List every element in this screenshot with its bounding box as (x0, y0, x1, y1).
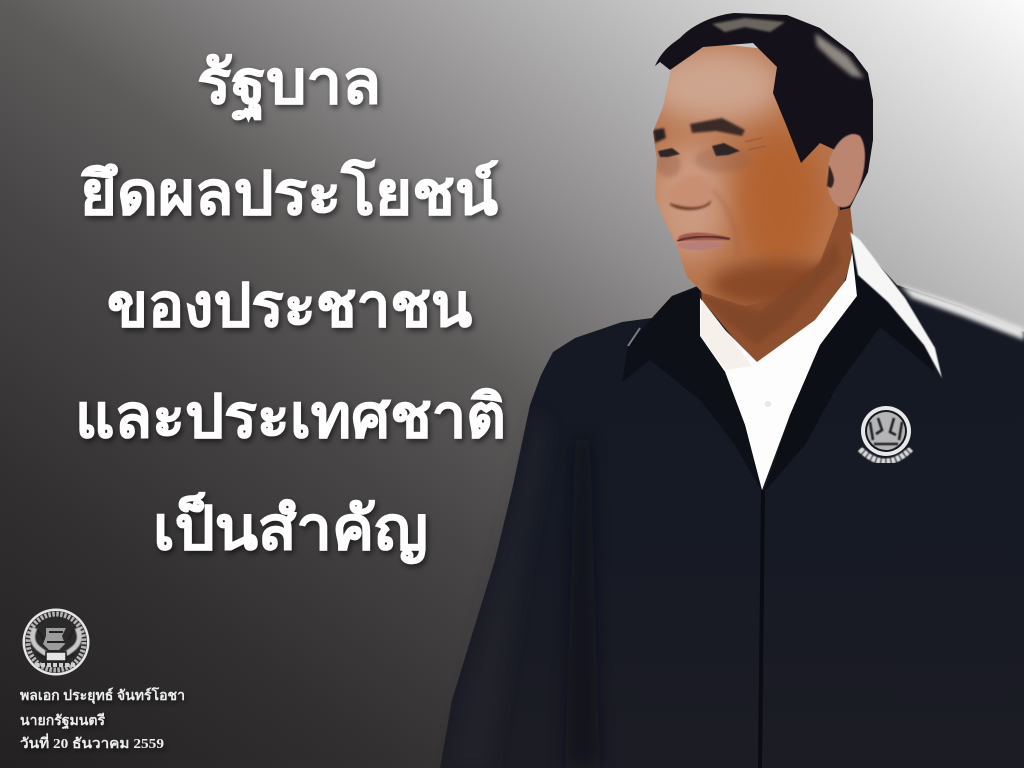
title line 4: และประเทศชาติ (75, 384, 506, 450)
cheek crease (712, 190, 730, 217)
ear (827, 134, 865, 207)
title line 1: รัฐบาล (197, 50, 381, 121)
title line 2: ยึดผลประโยชน์ (80, 158, 499, 227)
jacket zipper (760, 490, 763, 768)
portrait: man in dark jacket (440, 13, 1024, 768)
date: วันที่ 20 ธันวาคม 2559 (20, 733, 164, 752)
signature text block (20, 686, 185, 752)
arm lighter edge (448, 410, 550, 768)
position: นายกรัฐมนตรี (20, 713, 105, 730)
name: พลเอก ประยุทธ์ จันทร์โอชา (20, 686, 185, 704)
jacket (440, 232, 1024, 768)
neck (700, 200, 855, 363)
title line 5: เป็นสำคัญ (153, 492, 428, 564)
title line 3: ของประชาชน (107, 273, 472, 339)
main title (75, 50, 506, 564)
mouth (678, 233, 730, 241)
eyes (658, 148, 680, 157)
sleeve shading (565, 440, 600, 768)
eyebrows (653, 128, 666, 143)
face (653, 45, 838, 306)
shirt (700, 245, 857, 490)
jaw to neck shadow (700, 240, 840, 345)
jacket collar (622, 232, 942, 492)
head (645, 13, 875, 345)
nose (672, 177, 708, 206)
jacket shoulder highlight (900, 285, 1024, 340)
seal centre (43, 628, 66, 650)
hair highlights (712, 18, 785, 32)
jacket emblem (860, 406, 911, 462)
eye socket shadows (657, 153, 681, 177)
emblem: government seal (22, 608, 90, 676)
hair (655, 13, 873, 210)
